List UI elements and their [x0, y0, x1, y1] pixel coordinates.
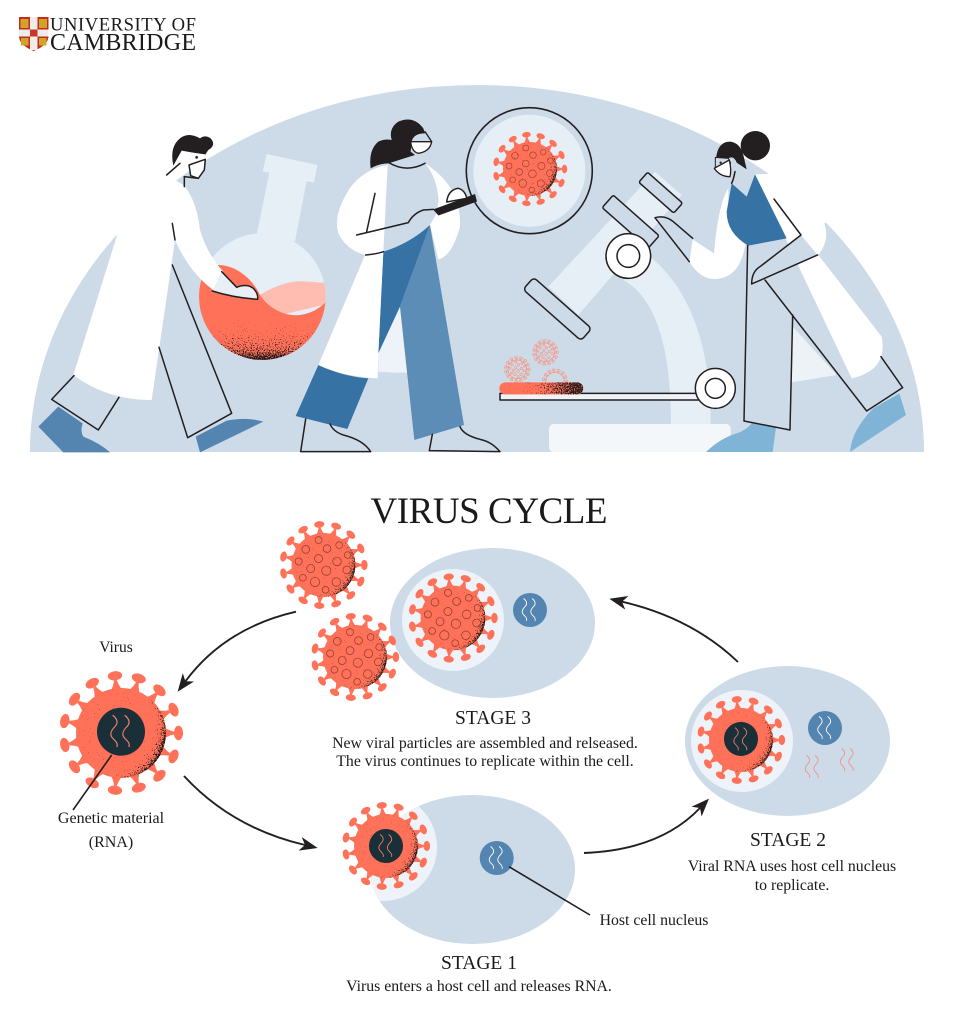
- label: genetic material: Genetic material: [58, 810, 165, 827]
- logo wordmark: UNIVERSITY OF: [50, 14, 196, 36]
- released virus top: [279, 521, 368, 609]
- label: genetic material: [58, 810, 165, 851]
- head and hair: [172, 135, 213, 178]
- nucleus: [480, 841, 514, 875]
- title: VIRUS CYCLE: [370, 491, 608, 532]
- text: stage 3: The virus continues to replicate within the cell.: [336, 753, 634, 770]
- virus diagram: [59, 670, 183, 810]
- label: host cell nucleus: Host cell nucleus: [600, 912, 708, 929]
- illustration panel: scientists background semicircle: [30, 85, 924, 452]
- virus in cell: [408, 573, 498, 663]
- shoes: [706, 393, 906, 452]
- arrow: stage 2 to stage 3: [622, 602, 738, 662]
- hand on flask: [212, 272, 258, 299]
- text: stage 2: Viral RNA uses host cell nucleus: [688, 858, 896, 875]
- text: stage 3: STAGE 3: [455, 708, 531, 729]
- icon: crest shield: [19, 17, 48, 51]
- virus entering: [342, 802, 430, 890]
- text: stage 3: New viral particles are assembled and relseased.: [332, 735, 638, 752]
- virus with RNA: [697, 696, 785, 784]
- handle and thumb: [433, 188, 477, 216]
- label: virus: Virus: [99, 639, 133, 656]
- text: stage 2: [688, 830, 896, 894]
- text: stage 3: [332, 708, 638, 770]
- logo wordmark: CAMBRIDGE: [50, 30, 196, 56]
- text: stage 1: STAGE 1: [441, 953, 517, 974]
- arrow: virus to stage 1: [184, 776, 305, 845]
- label: genetic material: (RNA): [89, 834, 133, 851]
- magnifying glass with virus: [433, 108, 592, 234]
- arrow: stage 1 to stage 2: [584, 808, 700, 853]
- flask liquid: [199, 264, 326, 360]
- head and hair: [370, 119, 432, 168]
- logo: University of Cambridge: [19, 14, 196, 56]
- replicated RNA: [805, 749, 853, 778]
- flask: [193, 154, 330, 363]
- arm: [752, 235, 818, 284]
- stage 3 cell: [390, 548, 595, 698]
- scientist 1: left with flask: [38, 135, 263, 452]
- text: stage 2: to replicate.: [755, 877, 829, 894]
- nucleus: [808, 711, 842, 745]
- lab coat: [755, 170, 883, 378]
- scientist 3: right at microscope: [655, 131, 906, 452]
- scientist 2: centre with magnifying glass: [296, 119, 500, 452]
- shoes: [38, 407, 263, 452]
- blue top: [727, 174, 787, 246]
- head, hair and bun: [714, 131, 770, 177]
- text: stage 2: STAGE 2: [750, 830, 826, 851]
- logo wordmark: [50, 14, 196, 56]
- arrow: stage 3 to virus: [185, 612, 296, 681]
- microscope: [499, 172, 735, 452]
- text: stage 1: [346, 953, 612, 995]
- magnified virus: [493, 131, 567, 207]
- stage 1 cell: [329, 793, 575, 944]
- nucleus: [513, 593, 547, 627]
- lab coat: [73, 150, 223, 400]
- pale virus particles on slide: [504, 339, 568, 395]
- released virus bottom: [311, 613, 399, 701]
- trouser outlines: [52, 163, 232, 438]
- leader line: host cell nucleus: [509, 867, 590, 915]
- text: stage 1: Virus enters a host cell and releases RNA.: [346, 978, 612, 995]
- lab coat: [318, 165, 388, 378]
- stage 2 cell: [685, 666, 890, 816]
